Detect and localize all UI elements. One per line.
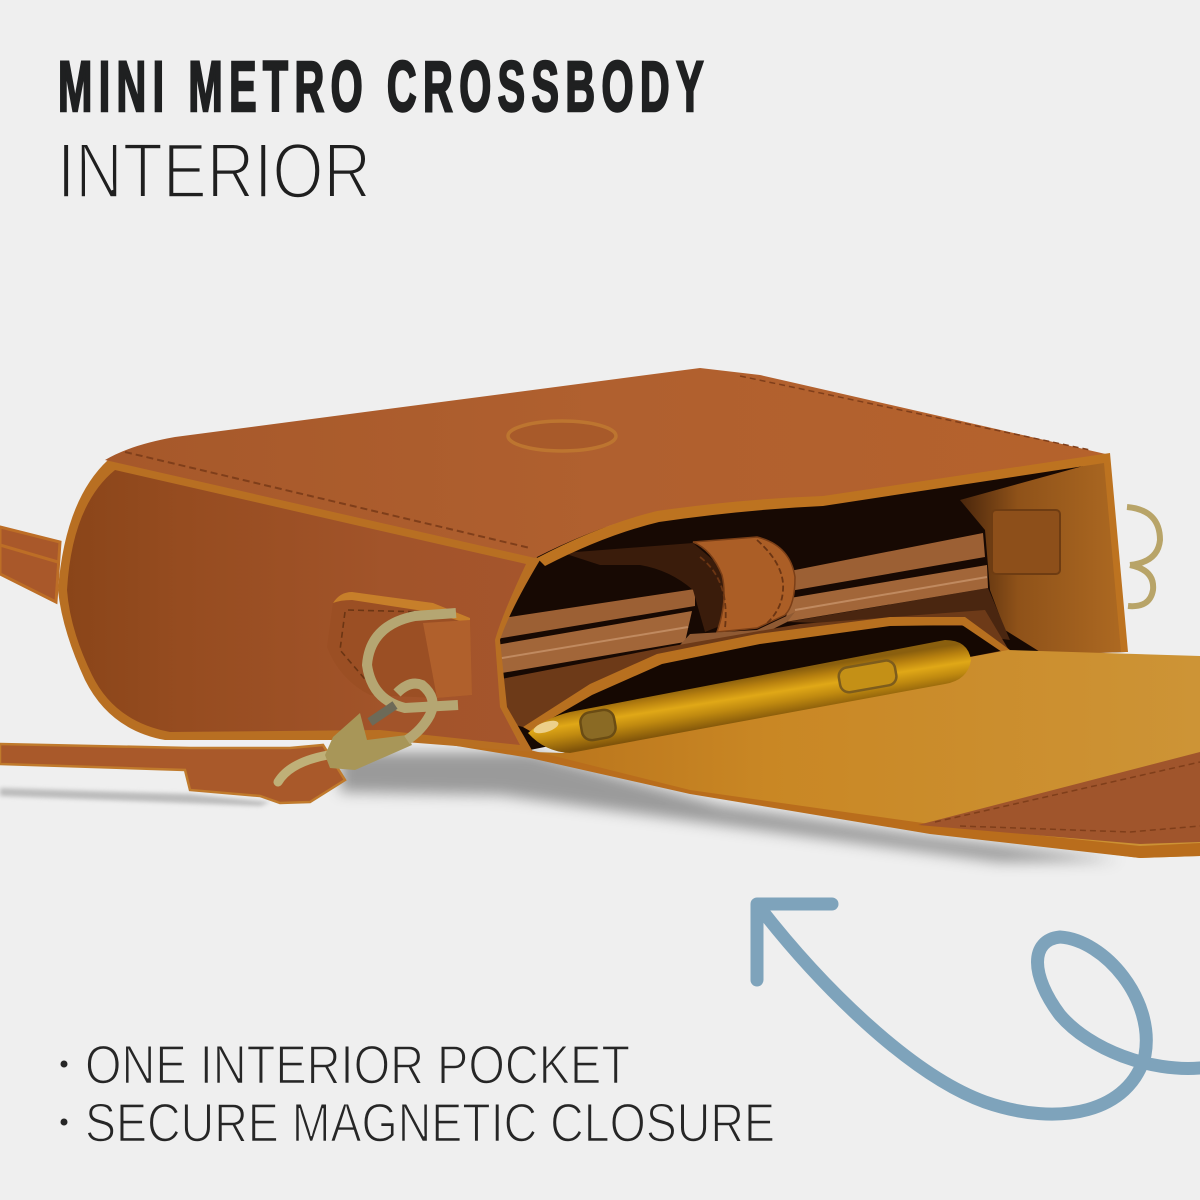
bullet: secure magnetic closure: SECURE MAGNETIC CLOSURE <box>85 1092 775 1154</box>
notebook dark back strap <box>563 543 735 632</box>
flap edge <box>420 740 1200 858</box>
bag front top panel <box>105 368 1110 558</box>
strap: back <box>0 527 60 602</box>
hardware: D ring <box>367 613 458 708</box>
subtitle: INTERIOR <box>57 126 371 214</box>
open flap suede interior <box>533 650 1200 858</box>
notebook bands left <box>496 589 695 639</box>
ground shadow: left strap <box>0 788 270 806</box>
bag illustration <box>0 368 1200 862</box>
bullet: one interior pocket: ONE INTERIOR POCKET <box>85 1034 630 1096</box>
notebook strap loop <box>693 537 795 632</box>
notebook <box>496 533 988 674</box>
notebook bands right <box>790 533 985 591</box>
strap: front <box>0 744 345 803</box>
top stitching <box>125 452 530 548</box>
lower dark suede below notebook <box>787 588 1010 640</box>
hardware: right ring <box>1127 507 1160 606</box>
bag side panel <box>67 470 526 745</box>
magnetic closure circle <box>508 421 616 451</box>
opening rim <box>537 453 1128 652</box>
strap tab on side <box>327 592 472 698</box>
pocket opening dark <box>527 625 1005 730</box>
ground shadow: under bag <box>340 752 1120 862</box>
arrow <box>757 904 1200 1114</box>
interior side wall suede <box>960 460 1126 655</box>
interior dark back <box>490 458 1126 752</box>
bullet list <box>60 1034 775 1154</box>
notebook tan strap under <box>680 612 795 645</box>
pocket rim <box>523 617 1010 731</box>
flap leather end <box>918 752 1200 844</box>
bag side panel rim <box>58 460 540 752</box>
interior tab <box>992 510 1060 574</box>
hardware: clasp <box>278 684 433 782</box>
inner pocket body <box>496 610 1010 727</box>
title: MINI METRO CROSSBODY <box>58 47 704 127</box>
phone <box>528 640 971 753</box>
